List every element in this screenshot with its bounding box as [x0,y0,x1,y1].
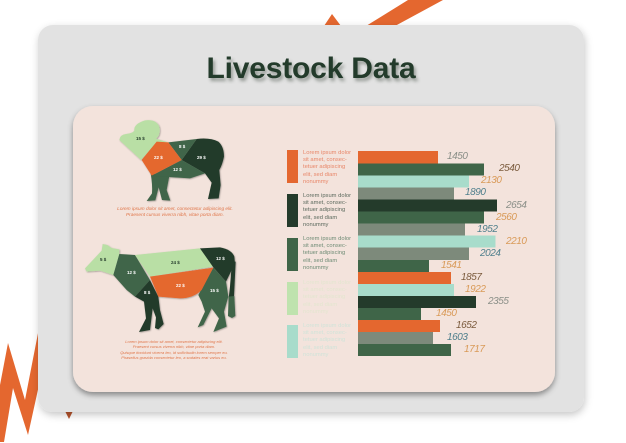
decorative orange zigzag bottom left [0,328,39,442]
cow percentage: head: 5 $ [100,257,106,262]
legend text: orange: sit amet, consec- [303,157,347,163]
cow neck [113,254,150,297]
sheep caption [117,206,233,218]
cow caption: Praesent cursus viverra nibh, vitae porta diam. [133,344,215,349]
sheep percentage: back: 8 $ [179,144,185,149]
bar value labels: 2560 [496,212,516,223]
legend text: dark green: Lorem ipsum dolor [303,193,351,199]
legend text: green: elit, sed diam [303,258,337,264]
cow front legs [135,280,164,332]
cow tail tuft [228,296,235,318]
legend text: orange: tetuer adipiscing [303,164,345,170]
cow hind [198,268,228,332]
sheep back [168,139,197,160]
legend text: dark green: elit, sed diam [303,215,337,221]
sheep caption: Praesent cursus viverra nibh, vitae porta diam. [126,213,224,218]
cow back [135,248,213,277]
legend text: light green: tetuer adipiscing [303,294,345,300]
legend text: dark green: sit amet, consec- [303,200,347,206]
legend text: green: nonummy [303,265,328,271]
cow percentage: belly: 22 $ [176,283,185,288]
sheep belly [152,160,205,178]
bar value labels: 1541 [441,260,461,271]
sheep percentage: rump: 29 $ [197,155,206,160]
legend text: mint: sit amet, consec- [303,330,347,336]
decorative orange zigzag bottom tip [65,411,73,419]
cow percentage: shoulder: 8 $ [144,290,150,295]
sheep percentage: belly: 12 $ [173,167,182,172]
sheep percentage: shoulder: 22 $ [154,155,163,160]
legend text: dark green: tetuer adipiscing [303,207,345,213]
bar value labels: 1890 [465,187,485,198]
legend text: dark green [303,193,351,228]
legend swatches [287,150,298,358]
cow caption: Phasellus gravida consectetur leo, a sodales erat varius eu. [121,355,227,360]
legend text: green [303,236,351,271]
cow percentage: rump: 12 $ [216,256,225,261]
legend text: mint [303,323,351,358]
legend text: light green [303,280,351,315]
legend text: orange: nonummy [303,179,328,185]
cow tail [229,262,236,298]
sheep rump [182,139,224,199]
bar value labels: 1922 [465,284,485,295]
cow percentage: hind: 15 $ [210,288,219,293]
legend text: light green: nonummy [303,309,328,315]
legend text: orange: Lorem ipsum dolor [303,150,351,156]
decorative orange zigzag top triangle [324,14,341,26]
legend text: mint: elit, sed diam [303,345,337,351]
bar value labels: 1952 [477,224,497,235]
legend text: mint: nonummy [303,352,328,358]
sheep legs [147,173,170,201]
bar value labels: 2130 [481,175,501,186]
bar value labels: 1857 [461,272,481,283]
bar value labels: 1450 [447,151,467,162]
bar value labels: 2210 [506,236,526,247]
sheep head [119,120,168,160]
title: Livestock Data [207,52,415,85]
cow percentage: neck: 12 $ [127,270,136,275]
legend text: light green: elit, sed diam [303,302,337,308]
cow illustration [85,244,236,332]
sheep caption: Lorem ipsum dolor sit amet, consectetur adipiscing elit. [117,207,233,212]
legend text: dark green: nonummy [303,222,328,228]
bar value labels: 1603 [447,332,467,343]
legend text: mint: tetuer adipiscing [303,337,345,343]
sheep illustration [119,120,224,201]
legend text: green: Lorem ipsum dolor [303,236,351,242]
bar value labels: 1652 [456,320,476,331]
cow belly [150,268,213,298]
bar value labels: 2355 [488,296,508,307]
horizontal bar chart [358,151,497,356]
bar value labels: 2540 [499,163,519,174]
legend text: light green: Lorem ipsum dolor [303,280,351,286]
cow head [85,244,119,275]
legend text: mint: Lorem ipsum dolor [303,323,351,329]
sheep percentage: head: 15 $ [136,136,145,141]
inner peach panel [73,106,555,392]
cow caption: Quisque tincidunt viverra leo, id sollicitudin lorem semper eu. [120,350,228,355]
outer grey card [38,25,584,412]
bar value labels: 2024 [480,248,500,259]
bar value labels: 2654 [506,200,526,211]
cow percentage: back: 24 $ [171,260,180,265]
bar value labels: 1450 [436,308,456,319]
legend text: orange [303,150,351,185]
sheep shoulder [142,142,182,176]
legend text: green: sit amet, consec- [303,243,347,249]
decorative orange zigzag top stripe [366,0,443,26]
cow caption [120,339,228,360]
cow rump [200,247,235,282]
legend text: green: tetuer adipiscing [303,250,345,256]
cow caption: Lorem ipsum dolor sit amet, consectetur adipiscing elit. [125,339,223,344]
legend text: light green: sit amet, consec- [303,287,347,293]
bar value labels: 1717 [464,344,484,355]
legend text: orange: elit, sed diam [303,172,337,178]
